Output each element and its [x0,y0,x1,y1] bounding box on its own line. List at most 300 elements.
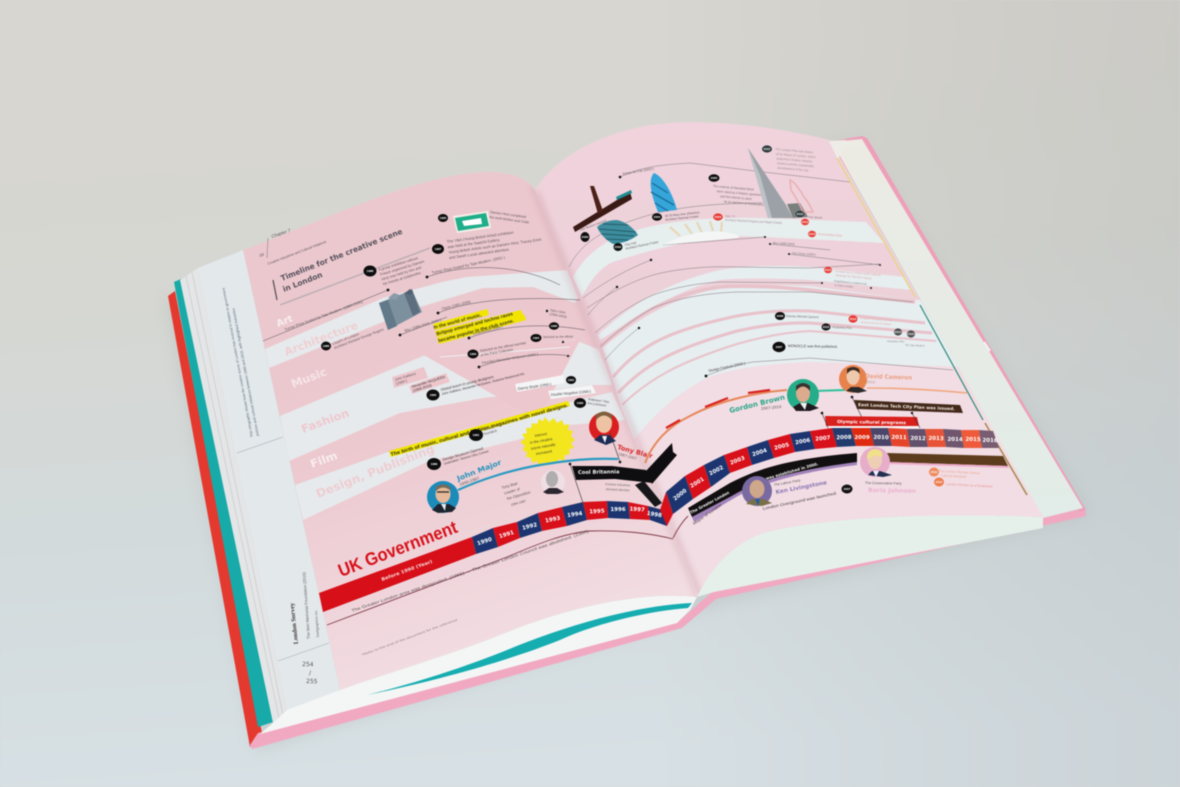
text Estate Art Fair: Estate Art Fair (2003-) [622,167,654,176]
yellow callout line 2 [435,310,523,337]
dot [468,337,470,339]
Tate Modern caption: Tate Modern Opened [579,218,607,232]
page base [535,122,920,596]
dot [426,276,428,278]
inverted pink triangle [426,340,579,397]
badge [580,232,590,242]
callout text: Britpop emerged and techno raves [436,311,514,337]
badge Overground [842,484,852,494]
black band [688,453,857,517]
McQueen label: (1969-2010) [412,383,432,393]
dot [764,236,766,238]
Wallpaper text: Wallpaper* Was [588,397,610,404]
year cell 1996 [607,501,630,519]
text Freeze: Hirst now held by him and [381,266,422,282]
brown page edge line [985,423,1027,495]
badge: 2013 [809,232,816,236]
YBA text: and Sarah Lucas attracted attention. [449,248,510,260]
badge: 2012 [802,220,809,224]
East London Tech City banner [851,396,963,428]
portrait Boris Johnson [860,447,892,477]
name David Cameron: David Cameron [865,373,912,382]
portrait Tony Blair small [541,470,565,494]
year cell 2003 [724,447,752,473]
year cell 2002: 2002 [708,465,725,477]
Design Festival caption: Design Festival (2003-) [708,361,746,373]
pink cover bottom left [250,508,1086,749]
year cell 1995: 1995 [589,509,605,515]
callout text: Interest [534,432,547,438]
lower panel [641,362,992,440]
dot [478,366,480,368]
panel: right page [535,122,1043,600]
reference note: *Refer to the end of the document for the reference [361,617,458,657]
portrait David Cameron [839,365,867,393]
text Freeze: A group exhibition without [378,256,418,272]
Oasis text: Oasis (1991-2009) [441,300,471,311]
badge Design Museum: 1989 [431,462,438,466]
Danny Boyle label: Danny Boyle (1956-) [518,382,552,391]
section: Film [309,375,596,471]
red cover edge [168,291,262,747]
white band between Music and Film [280,340,612,461]
badge MONOCLE: 2007 [776,345,783,349]
badge Monocle: 1996 [577,401,584,405]
London Survey: London Survey [289,602,300,645]
badge Monocle [574,398,586,408]
badge Stanley: 2008 [777,314,784,318]
dot [638,327,640,329]
icon: green cow artwork [453,211,491,233]
blue line [458,459,618,490]
year cell 2012: 2012 [910,436,926,442]
pointer dot [619,461,621,463]
portrait Ken Livingstone [742,476,772,506]
name Gordon Brown: Gordon Brown [729,393,786,415]
MONOCLE caption: MONOCLE was first published. [788,344,838,349]
red orange line [645,390,787,463]
dot [437,312,439,314]
publishing section right page [705,312,925,377]
pointer line [610,433,620,462]
dot [567,355,569,357]
year cell 1990: 1990 [476,537,493,547]
yellow page edge line [837,158,915,297]
McQueen label [409,373,450,394]
Turner Prize 2001: Turner Prize hosted by Tate Modern. (2001-) [431,255,506,275]
Film label: Film [309,449,339,471]
endpaper right [832,139,1083,518]
badge: 2014 [895,330,902,334]
page number: 254 [302,661,314,668]
badge Tomato: 1991 [568,378,575,382]
badge Tomato [566,376,576,384]
Conservative Party label: The Conservative Party [865,481,902,486]
pink strip under brown band [887,462,1009,468]
Tony Blair opposition text: Tony Blair [501,482,518,490]
left margin [198,250,340,712]
dot [650,259,652,261]
badge [801,219,809,225]
badge [708,174,720,182]
page number: 255 [306,678,318,685]
white architecture band [573,218,884,297]
name John Major: John Major [455,458,503,483]
Shard text: clusters and the sustainable [777,161,814,168]
white stadium bump [663,231,740,245]
dates David Cameron: 2010- [866,380,877,384]
badge [808,231,816,237]
badge Tomato [469,429,483,441]
white page block right [697,515,1043,597]
year cell 2000: 2000 [673,488,688,502]
brown band [887,453,1008,466]
badge red: 2013 [850,317,857,321]
Tate TV text: Architect Richard Rogers and Nigel Coates [725,218,783,225]
caption: The Tate Modern [905,343,925,348]
Art rule 2 [427,268,560,285]
badge [549,322,559,330]
portrait John Major [427,481,459,513]
badge: 2000 [582,235,589,239]
section: Music [289,299,585,391]
caption: Hostelries Film [832,325,852,330]
Olympic cultural programs banner [821,412,920,428]
timeline rule right [673,516,688,538]
callout text: scene naturally [531,443,556,451]
title accent bar [273,280,277,300]
banner text: East London Tech City Plan was issued. [858,402,956,411]
year cell 1994 [562,502,587,526]
Blur caption: Blur (1989-2003) [773,241,795,246]
year cell 2001 [685,465,711,499]
exterior text: and the interior is used [720,194,752,201]
timeline rule [327,531,673,625]
exterior text: The exterior of Stansted block [713,184,754,192]
year cell 2014 [943,429,964,448]
Art rule [263,290,388,341]
badge City Hall: 2002 [615,245,622,249]
portrait Tony Blair [589,412,619,445]
year cell 2000 [666,476,693,514]
year cell 1993: 1993 [545,516,561,524]
stacked pages left [180,268,287,723]
year cell 2015 [961,430,982,448]
year cell 2004: 2004 [751,448,768,458]
exterior text: as an aperture at Goldsmiths. [724,199,765,207]
section: Art [263,210,560,341]
badge Overground: 2007 [844,487,851,491]
badge [796,211,804,217]
Stanley caption: Stanley Mitchell Opened [786,314,819,319]
badge: 2010 [823,325,830,329]
badge 1997 YBA [432,244,444,254]
Labour Party label: The Labour Party [773,478,801,487]
Music label: Music [289,365,329,391]
City Hall text: City Hall [624,241,636,247]
name Ken Livingstone: Ken Livingstone [775,480,828,496]
text Freeze: his friends at Goldsmiths [383,271,421,286]
badge 1997 [364,266,376,276]
year cell 2016 [979,430,999,448]
Global boom text: Global boom in young designers [440,375,494,392]
title: Timeline for the creative scene [279,227,404,283]
year cell 1992: 1992 [522,522,538,532]
McQueen line [479,354,570,367]
divider line [237,437,283,453]
McQueen text: Founded Alexander McQueen (1992-) [482,352,538,365]
highlight text: The birth of music, cultural and fashion magazines with novel designs. [390,402,569,458]
Design, Publishing label: Design, Publishing [314,442,436,501]
stacked page lines [186,272,283,718]
flag pole [852,397,867,428]
red note: announced by the Mayor [861,320,892,326]
badge [822,323,830,331]
badge Global boom [426,390,440,400]
year cell 2015: 2015 [965,437,981,443]
band text continued: Authority was established in 2000. [744,461,819,487]
YBA text: The YBA (Young British Artist) exhibition [447,231,514,244]
note text: Cultural Olympiad [941,474,966,479]
white strip [598,266,912,340]
Greater London Authority band [673,453,1009,538]
Lloyd's text: Architect Richard George Rogers [334,327,385,350]
badge [824,267,832,273]
left margin: side note: This infographic shows how the creative scene of London has evolved in relation to government [222,287,254,438]
dot [879,264,881,266]
badge City Hall [614,243,622,251]
year cell 1994: 1994 [567,511,583,519]
year cell 2011: 2011 [891,435,907,441]
Spice Girls text: (1994-2000) [549,312,567,319]
orange line [867,388,967,393]
Underworld line [469,326,585,338]
Wallpaper text: first published. [587,401,607,408]
building: Orbit tower [790,180,813,212]
Architecture label: Architecture [282,319,360,359]
dot [399,334,401,336]
portrait Gordon Brown [787,379,819,411]
banner text: Cool Britannia [578,469,620,476]
architecture section right page [573,145,882,329]
badge: 2012 [825,268,832,272]
London Overground text: London Overground was launched. [762,490,838,511]
year cell 2007: 2007 [815,435,831,443]
book shadow [165,140,1092,752]
year cell 2012 [907,429,928,447]
year cell 1990 [472,528,498,554]
small note: Established a creative hub [834,279,867,286]
small note: in East London [835,283,854,289]
green line [815,390,845,391]
book cover and page edges [168,136,1086,749]
wooden sticks [670,221,722,236]
year cell 1998: 1998 [646,511,662,519]
Shard text: development of the city. [777,166,809,172]
John Galliano label: (1960-) [395,379,408,386]
The Shard caption: The Shard [808,215,822,220]
band text: The Greater London [689,490,730,515]
year cell 2006: 2006 [795,438,811,446]
Blur line [400,317,447,335]
Oasis line [438,299,580,313]
year cell 1991: 1991 [499,530,515,540]
badge 1995: 1995 [440,216,447,220]
Danny Boyle label [515,375,565,392]
Olympic notes [929,468,993,488]
badge: 2012 [931,470,938,474]
year cell 2011 [888,428,910,447]
year cell 2006 [790,431,815,452]
yellow highlight [389,401,570,457]
year cell 2003: 2003 [729,455,746,467]
section: Design, Publishing [314,397,610,501]
chapter label: Chapter 7 [271,228,291,239]
dates Tony Blair: 1997-2007 [618,452,637,461]
dot [788,253,790,255]
year cell 2007 [810,428,837,449]
year cell 2013 [925,429,946,447]
red note: Created as a London-wide cultural [835,269,881,277]
spine shade right [536,192,700,596]
Double Negative label: Double Negative (1998-) [551,390,591,397]
badge: 2005 [711,176,718,180]
slash: / [309,670,312,677]
building: The Shard [748,148,808,218]
red note: strategy for Olympic legacy [836,273,872,280]
pink cover top right [828,136,1086,512]
dot [705,375,707,377]
banner text: Olympic cultural programs [837,419,907,426]
Gordon Brown / Cameron line [645,388,967,463]
section: Architecture [282,289,422,359]
callout text: In the world of music, [433,313,482,331]
red bar [319,537,476,612]
badge Gherkin: 2004 [654,215,661,219]
Tony Blair opposition text: 1994-1997 [510,499,527,507]
badge: 1994 [533,336,540,340]
title second line: in London [281,270,324,294]
white band between Art and Music [265,270,582,368]
dates John Major: 1990-1997 [459,475,480,487]
chapter subtitle: Creative Industries and Cultural Initiatives [267,240,327,266]
badge 1997 YBA: 1997 [435,247,442,251]
page base [243,172,697,690]
year cell 2008 [832,428,856,447]
black ribbon tail [646,443,677,484]
Shard text: The London Plan was drawn [775,147,813,154]
Tomato text: founded. [483,429,498,436]
Lloyd's text: Lloyd's of London [332,332,360,346]
spine shade left [532,186,698,598]
badge: 2015 [908,332,915,336]
creative industries text: attracted attention [606,487,630,492]
Damien Hirst text: Damien Hirst completed [490,210,526,219]
year cell 2009: 2009 [854,435,870,441]
small black note [635,481,662,507]
badge 1997: 1988 [367,269,374,273]
divider [278,643,329,661]
heading block [259,227,430,305]
pink stripes [601,286,936,405]
Paris Collection text: of the Paris Collection [480,348,514,357]
publisher: The Mori Memorial Foundation (2015) [301,571,311,639]
Design Museum text: Undertaker: Terence Orby Conran [443,449,489,466]
panel: left page [243,172,698,690]
building: Lloyd's of London [379,289,422,330]
year cell 2001: 2001 [689,477,706,490]
badge Stanley [775,312,785,320]
badge Gherkin [652,213,662,221]
Turner Prize 1984: Turner Prize hosted by Tate Modern. (1984-2000) [284,299,364,332]
badge MONOCLE [772,342,786,352]
YBA text: Young British Artists such as Damien Hirst, Tracey Emin [448,238,542,255]
red notes: ArcelorMittal Orbit [818,232,842,238]
Art label: Art [275,313,295,330]
GLC text: The Greater London area was designated. (1965) → The Greater London Council was abolished. (1986) [351,528,590,613]
notch in pink edge [984,342,990,351]
callout text: became popular in the club scene. [438,318,515,344]
title underline [280,248,430,305]
section: Fashion [300,341,570,436]
Gherkin text: 30 St Mary Axe (Gherkin) [665,210,700,218]
Design Museum text: Design Museum Opened [442,447,484,462]
year cell 2009 [851,428,874,446]
pointer line [570,464,583,503]
yellow callout line 1 [433,309,489,330]
year cell 2016: 2016 [982,438,998,444]
white patch at top of page edge [829,140,846,160]
pointer dot [569,463,571,465]
dot [870,287,872,289]
badge: 2012 [797,212,804,216]
name Boris Johnson: Boris Johnson [868,487,916,495]
badge: 1995 [551,324,558,328]
purple strip [692,462,857,522]
white band between Film and UK Government [295,392,625,520]
Tate TV text: Tate TV [725,214,735,219]
flag pole right [912,413,920,428]
year cell 1993 [538,507,567,531]
dot [387,289,389,291]
chapter tick [267,238,268,258]
Global boom text: John Galliano, Alexander McQueen, Vivienne Westwood etc. [441,371,526,396]
Paris Collection text: Selected as the official member [479,341,527,353]
badge Tate TV [713,213,723,221]
Spice Girls text: Spice Girls [550,308,566,315]
Before 1990 label: Before 1990 (Year) [381,559,433,583]
badge Tomato: 1991 [473,433,480,437]
Shard text: supported creative industry [776,156,813,164]
small text: Selected as the official [543,334,573,339]
year strip 2000s [660,428,999,526]
note text: London Olympic as a Paralympic [946,482,993,488]
Cool Britannia banner [569,443,677,507]
year cell 2013: 2013 [928,436,944,442]
Fashion label: Fashion [300,407,351,436]
dot [619,176,621,178]
green page edge line [920,305,983,420]
caption: Hostelries Film [887,339,904,344]
red note: Creative Enterprise Zones [860,316,893,322]
Blur text: Blur (1989-2003, 2009-) [404,318,442,333]
dot [616,286,618,288]
badge: 2012 [936,480,943,484]
John Galliano label: John Galliano [394,372,416,382]
badge [530,334,542,342]
badge [894,328,902,336]
pole dot [911,412,913,414]
